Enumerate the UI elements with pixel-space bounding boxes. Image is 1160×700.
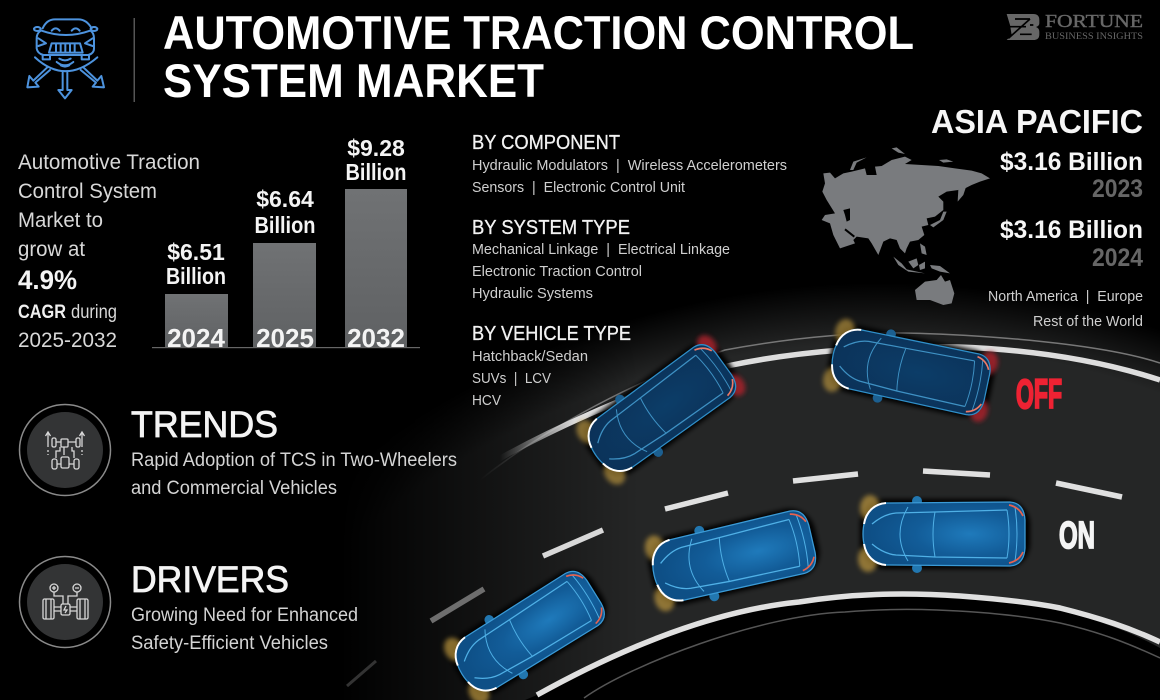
title: AUTOMOTIVE TRACTION CONTROL bbox=[163, 6, 914, 59]
regional values bbox=[1000, 148, 1143, 272]
text block: CAGR statement: grow at bbox=[18, 238, 85, 261]
bar 2032: $9.28 bbox=[347, 135, 405, 161]
title bbox=[163, 6, 914, 107]
heading and text: drivers: Safety-Efficient Vehicles bbox=[131, 633, 328, 654]
text block: CAGR statement: during bbox=[71, 302, 117, 323]
car: traction control off, first bbox=[570, 330, 751, 490]
heading and text: trends bbox=[131, 404, 457, 499]
icon: car with traction arrows bbox=[27, 19, 104, 98]
regional values: 2024 bbox=[1092, 244, 1143, 272]
label: ON: ON bbox=[1059, 515, 1095, 557]
segment: by vehicle type: SUVs | LCV bbox=[472, 370, 551, 387]
car: traction control on, first bbox=[438, 557, 618, 700]
segment: by vehicle type: HCV bbox=[472, 392, 501, 409]
title: SYSTEM MARKET bbox=[163, 54, 544, 107]
bar 2032: Billion bbox=[346, 159, 406, 185]
segment: by component: Hydraulic Modulators | Wireless Accelerometers bbox=[472, 157, 787, 174]
map: Asia Pacific bbox=[822, 147, 990, 305]
icon: drivers electric axle bbox=[20, 556, 110, 648]
bar 2024: Billion bbox=[166, 263, 226, 289]
segment: by system type bbox=[472, 217, 730, 302]
bar 2024 bbox=[165, 239, 228, 353]
text block: CAGR statement: Control System bbox=[18, 180, 157, 203]
bar 2025: 2025 bbox=[256, 323, 314, 353]
lane dashes bbox=[347, 471, 1122, 686]
heading and text: trends: and Commercial Vehicles bbox=[131, 478, 337, 499]
segment: by system type: Hydraulic Systems bbox=[472, 285, 593, 302]
heading and text: trends: Rapid Adoption of TCS in Two-Wheelers bbox=[131, 450, 457, 471]
regional values: 2023 bbox=[1092, 175, 1143, 203]
segment: by system type: Mechanical Linkage | Electrical Linkage bbox=[472, 241, 730, 258]
label: OFF: OFF bbox=[1016, 371, 1062, 417]
other regions bbox=[988, 288, 1143, 330]
other regions: North America | Europe bbox=[988, 288, 1143, 305]
logo: Fortune Business Insights: FORTUNE bbox=[1045, 11, 1143, 31]
text block: CAGR statement: Automotive Traction bbox=[18, 151, 200, 174]
segment: by vehicle type: Hatchback/Sedan bbox=[472, 348, 588, 365]
header divider bbox=[134, 18, 135, 102]
bar 2025: Billion bbox=[254, 212, 316, 238]
regional values: $3.16 Billion bbox=[1000, 148, 1143, 176]
car: traction control off, second bbox=[821, 317, 1000, 426]
heading: Asia Pacific: ASIA PACIFIC bbox=[931, 103, 1143, 140]
text block: CAGR statement: Market to bbox=[18, 209, 103, 232]
logo: Fortune Business Insights: BUSINESS INSIGHTS bbox=[1045, 32, 1143, 42]
bar 2024: $6.51 bbox=[167, 239, 225, 265]
segment: by vehicle type bbox=[472, 323, 631, 409]
bar 2032: 2032 bbox=[347, 323, 405, 353]
icon: trends drivetrain bbox=[20, 404, 110, 496]
heading and text: drivers bbox=[131, 559, 358, 654]
segment: by component bbox=[472, 132, 787, 196]
bar 2024: 2024 bbox=[167, 323, 225, 353]
text block: CAGR statement bbox=[18, 151, 200, 352]
text block: CAGR statement: 2025-2032 bbox=[18, 329, 117, 352]
road illustration bbox=[300, 280, 1160, 700]
regional values: $3.16 Billion bbox=[1000, 216, 1143, 244]
segment: by vehicle type: BY VEHICLE TYPE bbox=[472, 323, 631, 345]
text block: CAGR statement: 4.9% bbox=[18, 265, 77, 295]
segment: by system type: BY SYSTEM TYPE bbox=[472, 217, 630, 239]
car: traction control on, third bbox=[858, 495, 1030, 573]
heading and text: trends: TRENDS bbox=[131, 404, 278, 445]
heading and text: drivers: DRIVERS bbox=[131, 559, 289, 600]
bar 2025: $6.64 bbox=[256, 186, 314, 212]
bar chart: market size bbox=[152, 135, 420, 353]
segment: by component: Sensors | Electronic Control Unit bbox=[472, 179, 686, 196]
bar 2032 bbox=[345, 135, 407, 353]
car: traction control on, second bbox=[640, 500, 826, 614]
heading and text: drivers: Growing Need for Enhanced bbox=[131, 605, 358, 626]
logo: Fortune Business Insights bbox=[1007, 11, 1143, 42]
segment: by component: BY COMPONENT bbox=[472, 132, 620, 154]
text block: CAGR statement: CAGR bbox=[18, 302, 66, 323]
segment: by system type: Electronic Traction Control bbox=[472, 263, 642, 280]
other regions: Rest of the World bbox=[1033, 313, 1143, 330]
bar 2025 bbox=[253, 186, 316, 353]
